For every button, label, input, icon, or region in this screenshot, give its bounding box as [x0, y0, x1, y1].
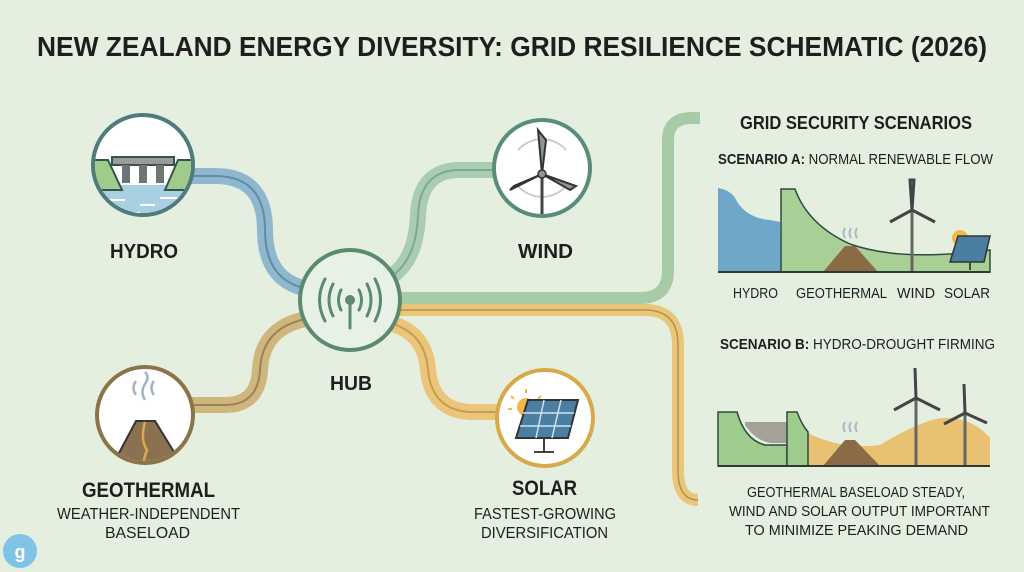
label: geothermal: GEOTHERMAL — [82, 479, 215, 502]
text: scenario B description — [729, 484, 990, 539]
icon: logo: g — [14, 542, 26, 562]
label: hydro: HYDRO — [110, 241, 178, 263]
icon: solar — [497, 370, 593, 466]
text: scenario B description: WIND AND SOLAR OUTPUT IMPORTANT — [729, 503, 990, 520]
label: solar: DIVERSIFICATION — [481, 525, 608, 542]
label: hub: HUB — [330, 373, 372, 395]
labels: scenario A sources — [733, 285, 990, 302]
icon: hub — [300, 250, 400, 350]
path: hydro to hub — [190, 176, 315, 290]
labels: scenario A sources: SOLAR — [944, 285, 990, 302]
icon: geothermal — [97, 367, 193, 470]
panel: grid security scenarios — [718, 113, 995, 539]
chart: scenario B landscape — [718, 368, 990, 466]
path: hub to scenario A (green) — [398, 118, 700, 298]
path: geothermal to hub — [192, 318, 312, 405]
label: geothermal: WEATHER-INDEPENDENT — [57, 506, 240, 523]
path: hub to scenario B (yellow) — [398, 310, 698, 500]
label: wind: WIND — [518, 241, 573, 263]
path: hub to solar — [385, 322, 498, 412]
icon: hydro — [91, 113, 195, 217]
label: solar — [474, 477, 616, 542]
chart: scenario A landscape — [718, 180, 990, 272]
icon: wind — [494, 120, 590, 216]
text: scenario B description: GEOTHERMAL BASELOAD STEADY, — [747, 484, 965, 501]
labels: scenario A sources: WIND — [897, 285, 935, 302]
label: solar: SOLAR — [512, 477, 577, 500]
heading: scenario B: SCENARIO B: HYDRO-DROUGHT FIRMING — [720, 336, 995, 353]
icon: logo — [3, 534, 37, 568]
text: scenario B description: TO MINIMIZE PEAKING DEMAND — [745, 522, 968, 539]
path: wind to hub — [385, 170, 495, 280]
heading: scenario A: SCENARIO A: NORMAL RENEWABLE FLOW — [718, 151, 994, 168]
labels: scenario A sources: HYDRO — [733, 285, 778, 302]
label: geothermal: BASELOAD — [105, 525, 190, 542]
label: solar: FASTEST-GROWING — [474, 506, 616, 523]
heading: grid security scenarios: GRID SECURITY SCENARIOS — [740, 113, 972, 133]
title: NEW ZEALAND ENERGY DIVERSITY: GRID RESILIENCE SCHEMATIC (2026) — [37, 31, 987, 62]
label: geothermal — [57, 479, 240, 542]
labels: scenario A sources: GEOTHERMAL — [796, 285, 887, 302]
